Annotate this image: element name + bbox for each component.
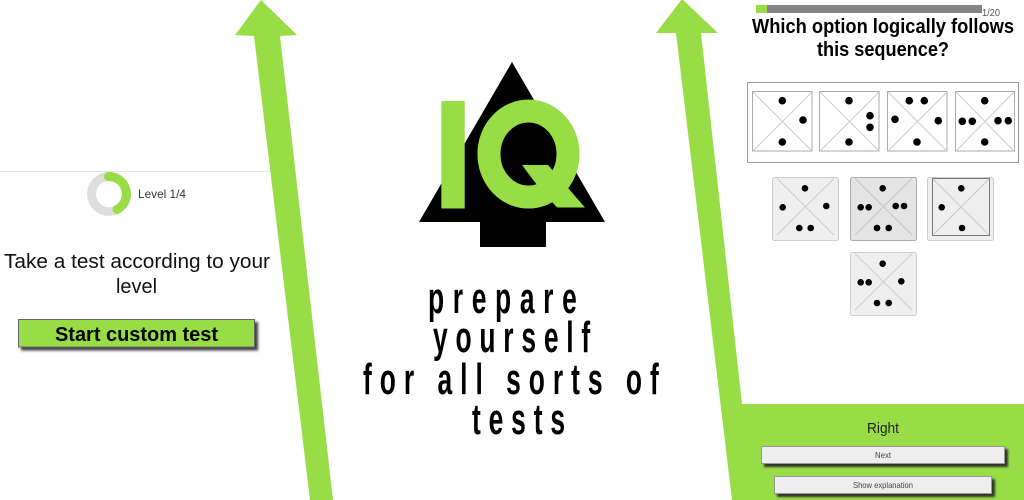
panel: question screen (748, 5, 1018, 316)
answer option 3 selected (928, 178, 994, 240)
next button (762, 446, 1004, 464)
logo letter Q (478, 100, 585, 208)
sequence tile 1 (752, 92, 812, 151)
question heading: this sequence? (817, 39, 949, 61)
level progress ring (92, 176, 126, 212)
start custom test button (18, 320, 254, 347)
level label: Level 1/4 (138, 187, 186, 201)
sequence box (748, 82, 1018, 162)
progress bar (756, 5, 1000, 19)
tagline: tests (472, 394, 565, 444)
panel: result feedback (762, 421, 1004, 494)
instruction text (4, 251, 270, 298)
answer option 1 (772, 178, 838, 240)
tagline: yourself (433, 312, 591, 362)
panel: custom test screen (0, 171, 270, 347)
instruction text: Take a test according to your (4, 251, 270, 273)
logo letter I: I (432, 68, 475, 241)
answer option 4 (850, 252, 916, 316)
answer option 2 (850, 178, 916, 240)
question heading (752, 16, 1014, 61)
start custom test button: Start custom test (55, 324, 218, 346)
show explanation button: Show explanation (853, 480, 913, 490)
progress bar: 1/20 (982, 8, 1000, 19)
tagline: for all sorts of (363, 354, 659, 404)
next button: Next (875, 450, 892, 460)
logo: IQ arrow mark (419, 62, 605, 247)
tagline (363, 273, 659, 444)
arrow: right green arrow and result panel (656, 0, 1024, 500)
logo letter Q: Q (470, 73, 586, 240)
sequence tile 4 (956, 92, 1014, 151)
logo arrow shape (419, 62, 605, 247)
result label: Right (867, 421, 899, 437)
tagline: prepare (428, 273, 577, 323)
show explanation button (774, 476, 992, 494)
instruction text: level (116, 276, 157, 298)
sequence tile 2 (820, 92, 879, 151)
arrow: left green arrow (235, 0, 333, 500)
sequence tile 3 (888, 92, 947, 151)
